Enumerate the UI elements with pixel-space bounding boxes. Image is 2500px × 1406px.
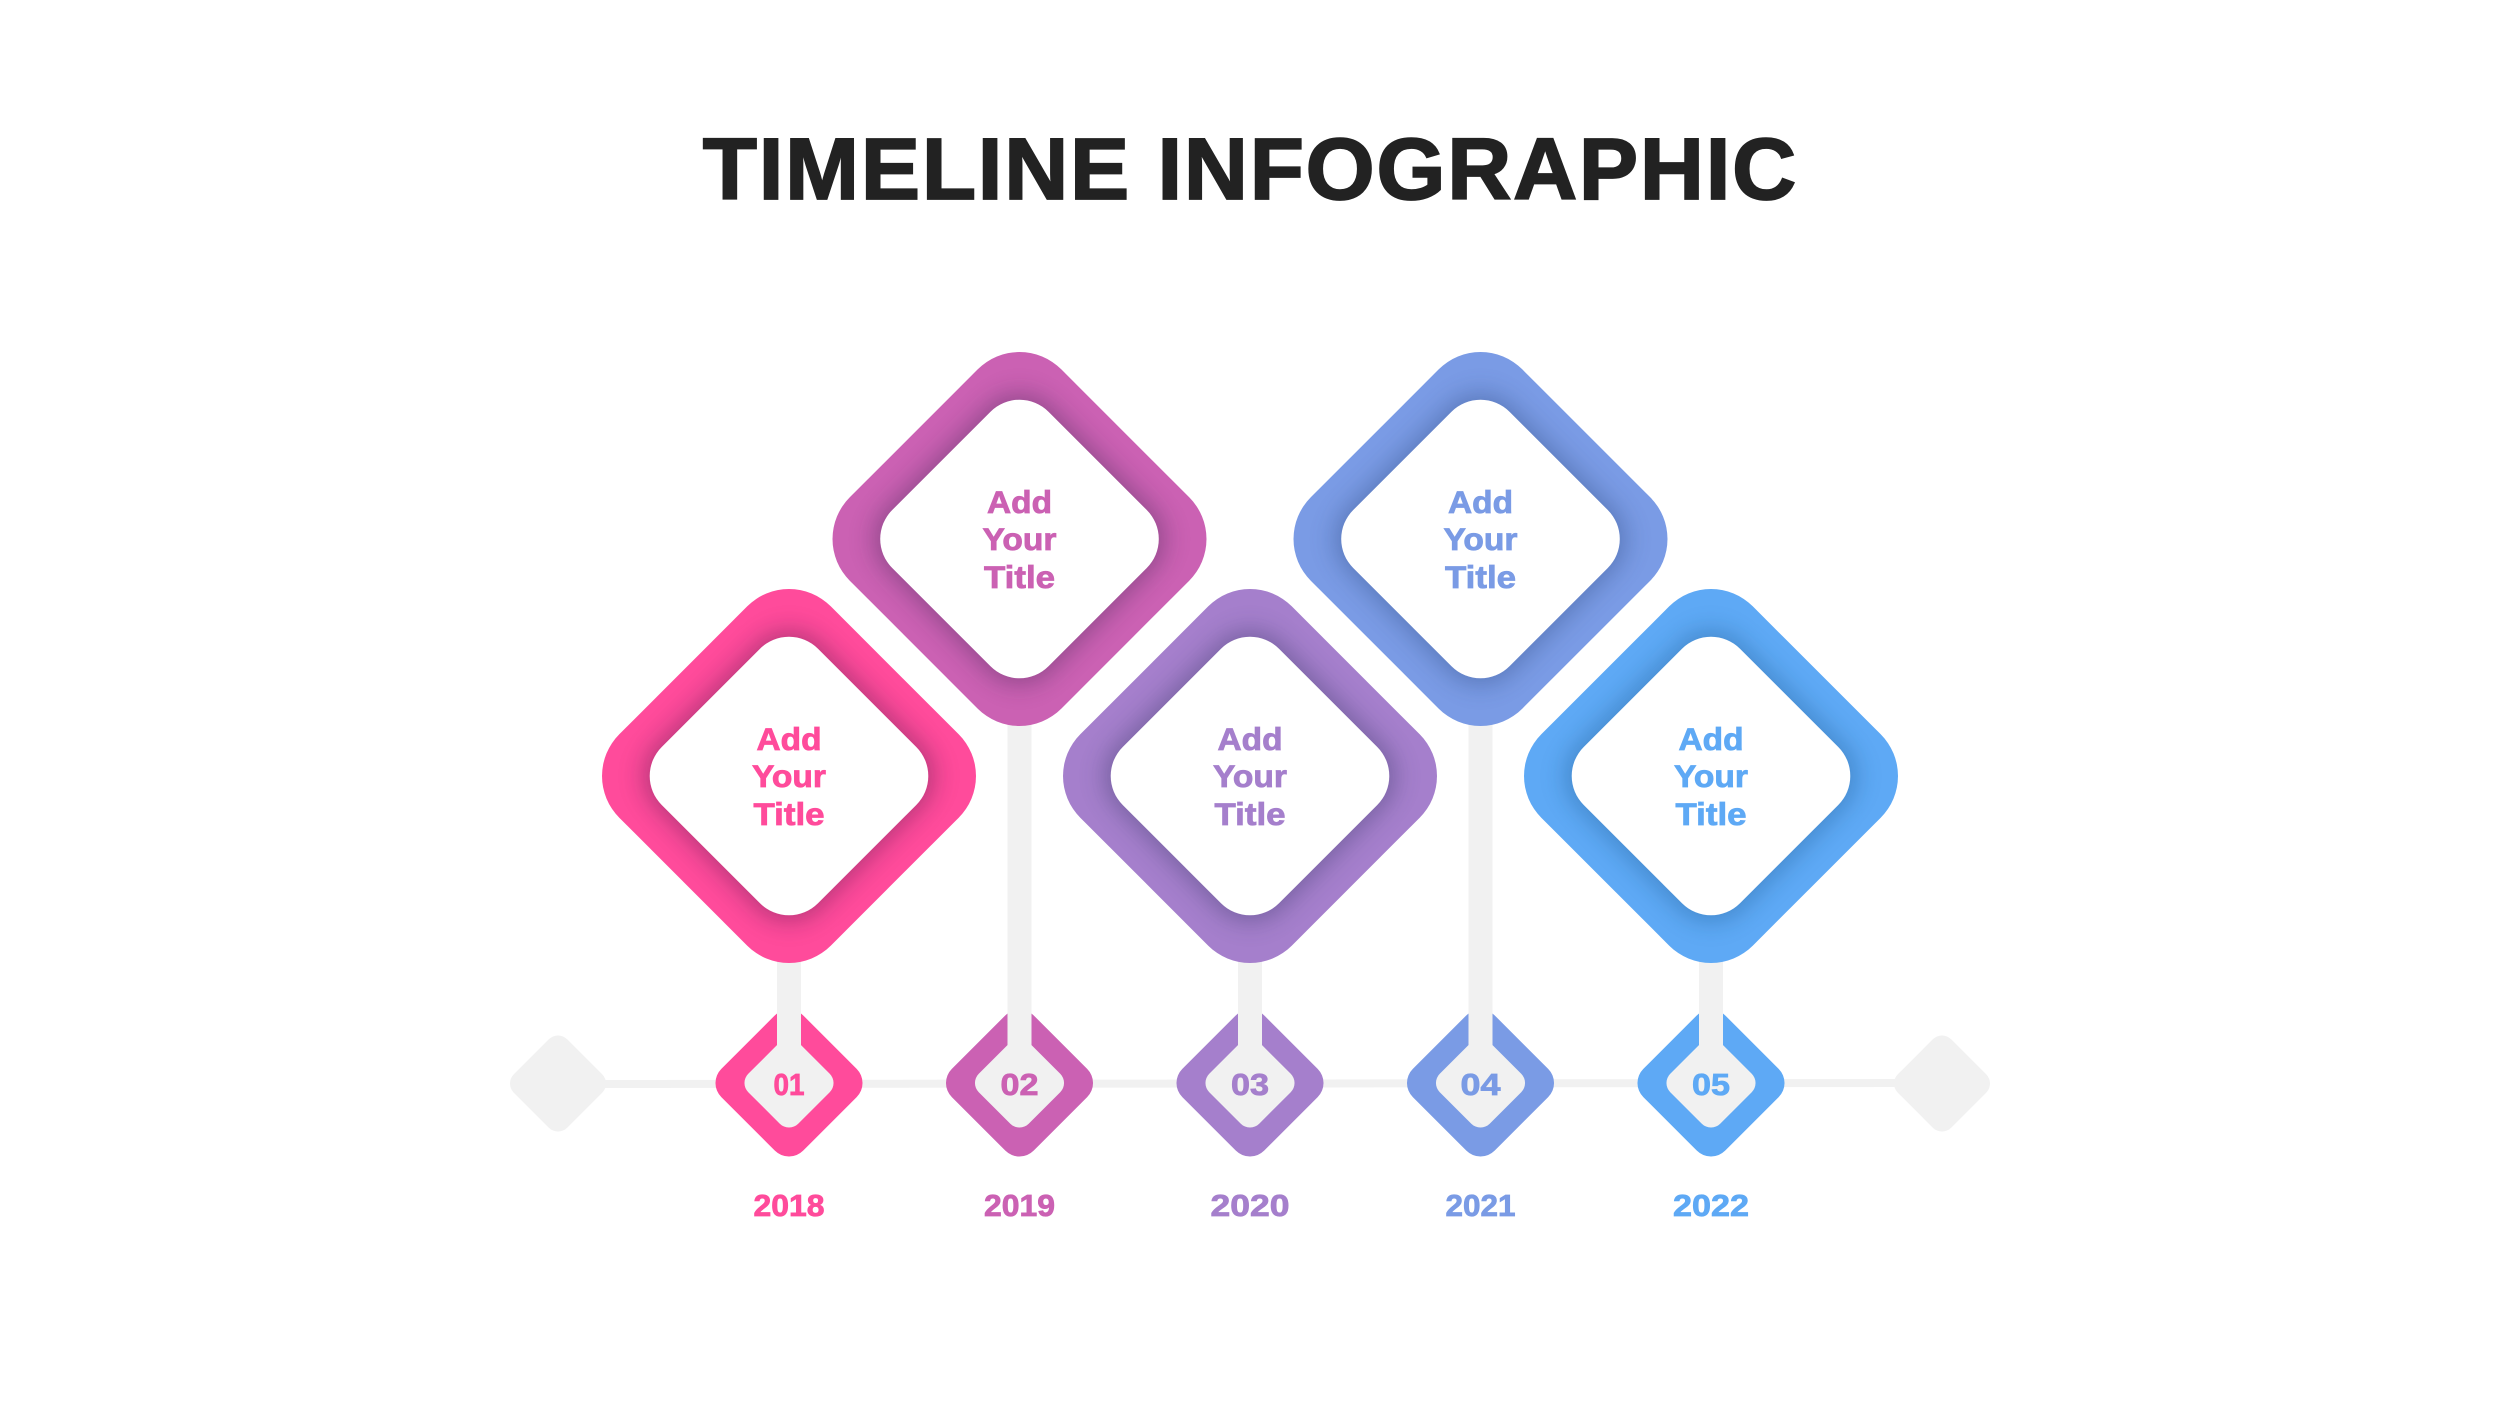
milestone 02 node: 02 (1000, 1067, 1038, 1102)
card 01 diamond: Title (754, 796, 824, 832)
year 2021: 2021 (1446, 1188, 1516, 1223)
card 04 diamond: Your (1444, 521, 1518, 557)
milestone 01 node: 01 (774, 1067, 804, 1102)
card 03 diamond: Your (1213, 758, 1287, 794)
year 2019: 2019 (984, 1188, 1055, 1223)
card 02 diamond (832, 352, 1206, 726)
right end diamond (1889, 1030, 1995, 1137)
card 02 diamond: Your (982, 521, 1056, 557)
card 01 diamond (602, 589, 976, 963)
timeline base line (558, 1083, 1942, 1084)
card 04 diamond: Title (1445, 559, 1516, 595)
card 01 diamond: Add (756, 721, 822, 757)
card 03 diamond: Add (1218, 721, 1282, 757)
card 05 diamond: Title (1676, 796, 1746, 832)
card 01 diamond: Your (752, 758, 826, 794)
year 2020: 2020 (1210, 1188, 1290, 1223)
card 05 diamond: Add (1678, 721, 1744, 757)
title: TIMELINE INFOGRAPHIC (703, 120, 1796, 218)
milestone 04 node (1399, 700, 1562, 1165)
left end diamond (505, 1030, 611, 1137)
milestone 05 node (1629, 950, 1793, 1165)
card 04 diamond (1294, 352, 1668, 726)
card 04 diamond: Add (1448, 484, 1513, 520)
milestone 03 node: 03 (1231, 1067, 1269, 1102)
card 02 diamond: Add (987, 484, 1052, 520)
card 03 diamond: Title (1214, 796, 1286, 832)
year 2022: 2022 (1673, 1188, 1749, 1223)
infographic canvas (510, 137, 1990, 1217)
year 2018: 2018 (754, 1188, 824, 1223)
card 05 diamond: Your (1674, 758, 1748, 794)
milestone 05 node: 05 (1692, 1067, 1730, 1102)
card 03 diamond (1063, 589, 1437, 963)
milestone 02 node (938, 700, 1101, 1165)
milestone 04 node: 04 (1460, 1067, 1501, 1102)
card 05 diamond (1524, 589, 1898, 963)
milestone 01 node (707, 950, 871, 1165)
milestone 03 node (1168, 950, 1332, 1165)
card 02 diamond: Title (984, 559, 1055, 595)
